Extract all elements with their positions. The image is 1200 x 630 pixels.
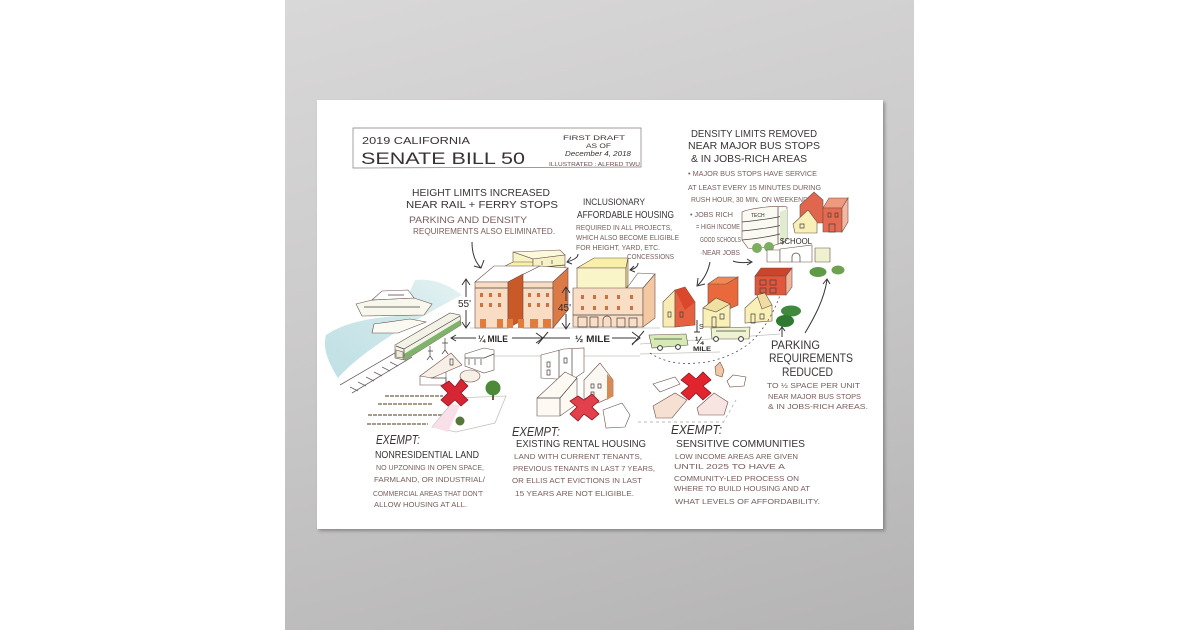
exempt text: nonresidential land: NONRESIDENTIAL LAND	[375, 449, 479, 461]
gray wall background	[285, 0, 914, 630]
ferry	[356, 290, 432, 333]
heading: inclusionary affordable housing	[576, 197, 679, 261]
heading: inclusionary affordable housing: AFFORDABLE HOUSING	[577, 209, 674, 221]
mile markers: ¼ MILE	[478, 334, 508, 344]
exempt text: nonresidential land: COMMERCIAL AREAS THAT DON'T	[373, 489, 483, 498]
building: inclusionary block	[573, 258, 655, 327]
brick fronts	[475, 266, 568, 328]
water	[325, 280, 462, 378]
heading: height limits: NEAR RAIL + FERRY STOPS	[406, 199, 558, 211]
exempt text: existing rental housing: OR ELLIS ACT EVICTIONS IN LAST	[512, 476, 642, 485]
heading: height limits	[406, 187, 558, 236]
trees	[752, 242, 774, 253]
shrubs	[776, 306, 801, 327]
parking requirements reduced text: PARKING	[771, 340, 820, 352]
parking requirements reduced text	[767, 340, 868, 411]
title box: AS OF	[586, 143, 611, 150]
mile markers: ½ MILE	[575, 334, 610, 344]
heading: density limits removed: ·NEAR JOBS	[700, 248, 740, 257]
red x: sensitive communities	[681, 372, 711, 400]
parking requirements reduced text: & IN JOBS-RICH AREAS.	[768, 402, 868, 411]
barn	[465, 348, 494, 373]
yellow house top	[793, 210, 817, 233]
dimension: 55 feet: 55'	[458, 299, 471, 310]
red building	[823, 198, 848, 232]
bus 1	[649, 334, 688, 350]
red apartment	[755, 268, 792, 295]
arrow: density to houses	[697, 262, 710, 286]
yellow house	[703, 298, 730, 327]
exempt scene: nonresidential land	[367, 348, 506, 432]
exempt text: sensitive communities	[671, 422, 820, 506]
heading: height limits: HEIGHT LIMITS INCREASED	[412, 187, 550, 199]
exempt text: existing rental housing: LAND WITH CURRENT TENANTS,	[514, 452, 642, 461]
dimension: 45 feet: 45'	[558, 303, 571, 314]
park	[432, 396, 506, 432]
farmhouse	[420, 353, 462, 385]
orange apartment	[708, 277, 738, 313]
mile markers	[451, 331, 644, 345]
heading: height limits: REQUIREMENTS ALSO ELIMINATED.	[413, 227, 555, 236]
silo	[460, 370, 480, 382]
building: tall mixed-use near rail	[475, 250, 568, 328]
arrow: jobs-rich to office	[733, 259, 752, 265]
pedestrians	[427, 338, 448, 360]
exempt text: sensitive communities: COMMUNITY-LED PROCESS ON	[674, 474, 799, 483]
heading: density limits removed: & IN JOBS-RICH AREAS	[691, 153, 807, 165]
parking requirements reduced text: TO ½ SPACE PER UNIT	[767, 381, 860, 390]
title box	[353, 128, 641, 168]
parking requirements reduced text: REQUIREMENTS	[769, 353, 853, 365]
tree	[486, 380, 500, 400]
bus stop sign and quarter mile: ¼	[695, 336, 704, 347]
exempt scene: sensitive communities	[638, 362, 746, 423]
exempt text: nonresidential land: NO UPZONING IN OPEN SPACE,	[376, 463, 484, 472]
exempt text: existing rental housing: EXEMPT:	[512, 424, 560, 439]
heading: inclusionary affordable housing: FOR HEIGHT, YARD, ETC.	[576, 243, 660, 252]
yellow upper floors	[505, 250, 565, 278]
title box: 2019 CALIFORNIA	[362, 135, 470, 147]
tech office: TECH	[751, 213, 765, 219]
heading: density limits removed	[688, 128, 821, 257]
exempt text: sensitive communities: SENSITIVE COMMUNITIES	[676, 438, 805, 450]
exempt text: nonresidential land	[373, 432, 486, 509]
exempt text: sensitive communities: EXEMPT:	[671, 422, 722, 437]
arrow: parking to cars	[805, 279, 830, 333]
school: $CHOOL	[780, 237, 813, 246]
train and tracks	[340, 313, 461, 393]
yellow house 3	[745, 293, 772, 323]
exempt scene: rental housing	[537, 348, 630, 428]
heading: density limits removed: • MAJOR BUS STOPS HAVE SERVICE	[688, 169, 817, 178]
red house	[663, 287, 695, 327]
bus 2	[711, 327, 750, 341]
exempt text: existing rental housing: 15 YEARS ARE NOT ELIGIBLE.	[515, 489, 634, 498]
arrow: to yellow block	[630, 263, 638, 272]
exempt text: sensitive communities: UNTIL 2025 TO HAVE A	[674, 462, 785, 471]
houses along bus route	[663, 268, 801, 327]
heading: density limits removed: = HIGH INCOME	[696, 222, 740, 231]
ground lines	[405, 317, 780, 356]
heading: density limits removed: RUSH HOUR, 30 MIN. ON WEEKEND	[691, 195, 809, 204]
poster sheet	[317, 100, 883, 529]
parking requirements reduced text: REDUCED	[782, 367, 833, 379]
bus stop sign and quarter mile: S	[699, 324, 704, 331]
dimension: 55 feet	[458, 279, 471, 328]
exempt text: sensitive communities: WHAT LEVELS OF AFFORDABILITY.	[675, 497, 820, 506]
heading: density limits removed: NEAR MAJOR BUS STOPS	[688, 140, 820, 152]
top right district	[742, 192, 848, 277]
title box: ILLUSTRATED : ALFRED TWU	[549, 162, 640, 168]
heading: density limits removed: DENSITY LIMITS REMOVED	[691, 128, 817, 140]
title box: SENATE BILL 50	[361, 149, 525, 168]
red house top	[800, 192, 823, 223]
arrow: rail and ferry callout	[472, 242, 484, 268]
heading: density limits removed: AT LEAST EVERY 15 MINUTES DURING	[688, 183, 821, 192]
heading: inclusionary affordable housing: CONCESSIONS	[627, 252, 674, 261]
parking requirements reduced text: NEAR MAJOR BUS STOPS	[768, 392, 861, 401]
dimension: 45 feet	[558, 287, 571, 329]
title box: FIRST DRAFT	[563, 135, 625, 142]
red x: rental housing	[570, 394, 599, 421]
pink park edge	[432, 404, 460, 432]
exempt text: sensitive communities: WHERE TO BUILD HOUSING AND AT	[674, 484, 810, 493]
exempt text: existing rental housing	[512, 424, 655, 498]
heading: density limits removed: • JOBS RICH	[690, 210, 733, 219]
bus stop sign and quarter mile: MILE	[693, 346, 712, 353]
arrow: parking to shrubs	[779, 327, 785, 337]
exempt text: existing rental housing: EXISTING RENTAL HOUSING	[516, 438, 646, 450]
heading: inclusionary affordable housing: INCLUSIONARY	[583, 197, 646, 208]
cars	[810, 266, 844, 277]
exempt text: nonresidential land: FARMLAND, OR INDUSTRIAL/	[374, 475, 486, 484]
dashed radius	[650, 295, 780, 363]
arrow: to upper floors	[567, 254, 578, 264]
heading: inclusionary affordable housing: WHICH ALSO BECOME ELIGIBLE	[576, 233, 679, 242]
bus stop sign and quarter mile	[693, 320, 712, 353]
red x: nonresidential land	[441, 379, 468, 406]
exempt text: sensitive communities: LOW INCOME AREAS ARE GIVEN	[675, 452, 798, 461]
heading: height limits: PARKING AND DENSITY	[409, 215, 527, 225]
farm fields	[367, 396, 443, 424]
exempt text: nonresidential land: EXEMPT:	[376, 432, 420, 447]
exempt text: nonresidential land: ALLOW HOUSING AT ALL.	[374, 500, 467, 509]
heading: inclusionary affordable housing: REQUIRED IN ALL PROJECTS,	[576, 223, 672, 232]
title box: December 4, 2018	[565, 151, 631, 158]
exempt text: existing rental housing: PREVIOUS TENANTS IN LAST 7 YEARS,	[513, 464, 655, 473]
heading: density limits removed: GOOD SCHOOLS	[700, 235, 741, 244]
